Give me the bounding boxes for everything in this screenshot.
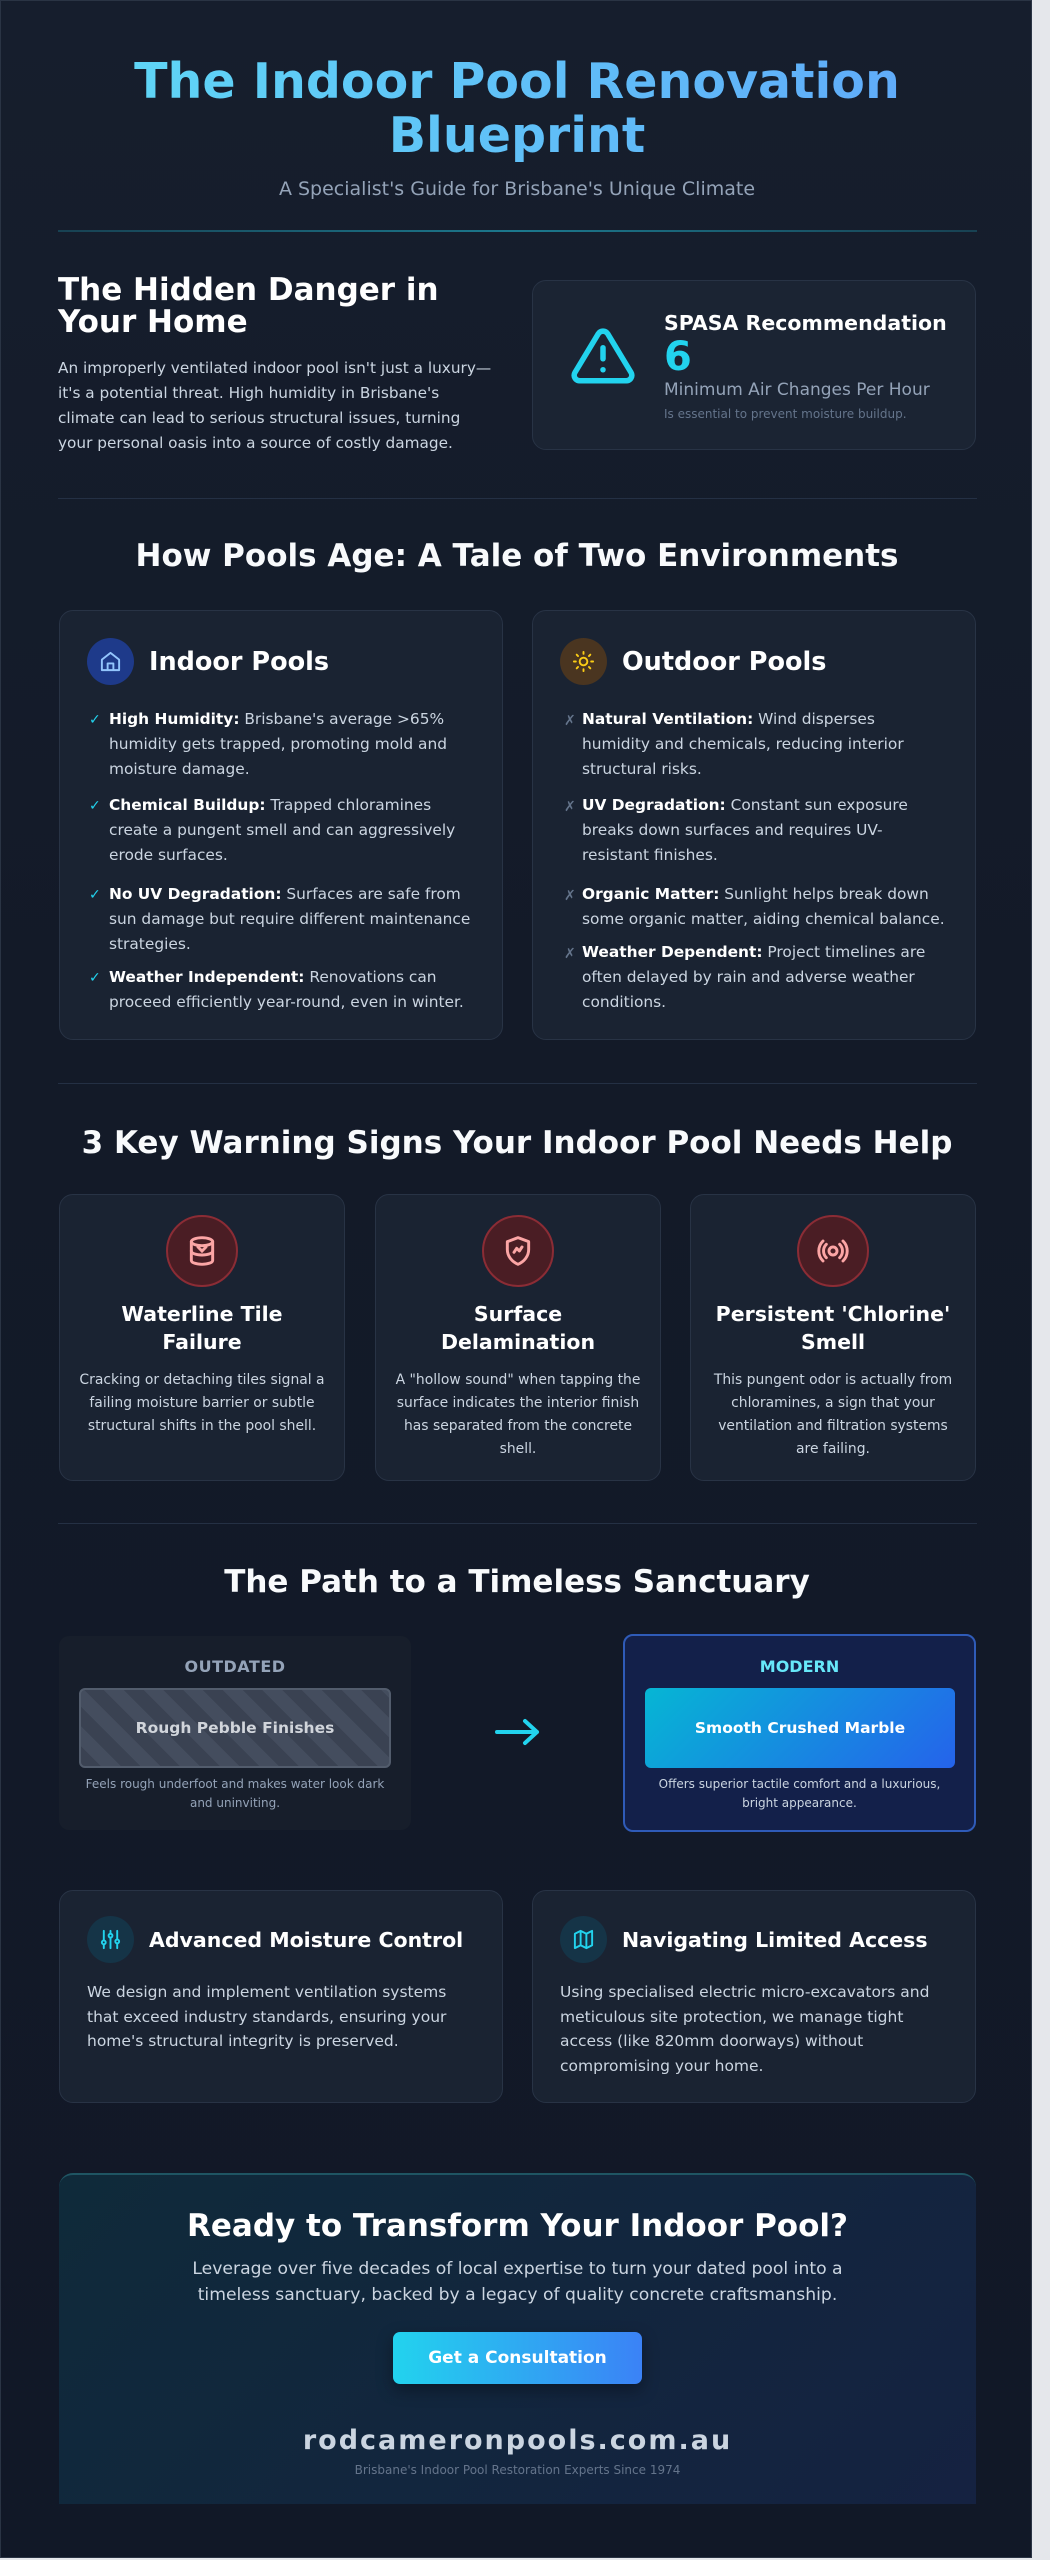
text: limited access: Using specialised electric micro-excavators and xyxy=(560,1983,929,2001)
swatch: smooth marble: Smooth Crushed Marble xyxy=(695,1719,905,1737)
text: waterline: Cracking or detaching tiles signal a xyxy=(79,1372,325,1388)
text: modern desc: Offers superior tactile comfort and a luxurious, xyxy=(659,1777,940,1791)
heading: hidden danger: Your Home xyxy=(58,304,248,340)
heading: indoor pools: Indoor Pools xyxy=(149,647,329,677)
text: delamination: surface indicates the interior finish xyxy=(397,1395,639,1411)
list: outdoor points: Organic Matter: Sunlight helps break down xyxy=(582,885,929,903)
list: indoor points: strategies. xyxy=(109,935,191,953)
panel: call to action xyxy=(59,2173,976,2504)
list: outdoor points xyxy=(564,710,945,1011)
list: indoor points: ✓ xyxy=(89,887,101,903)
text: hidden danger paragraph: An improperly ventilated indoor pool isn't just a luxury— xyxy=(58,359,491,377)
text: waterline: structural shifts in the pool shell. xyxy=(88,1418,316,1434)
text: chlorine: chloramines, a sign that your xyxy=(731,1395,935,1411)
list: indoor points: ✓ xyxy=(89,712,101,728)
text: hidden danger paragraph: climate can lead to serious structural issues, turning xyxy=(58,409,460,427)
button: consultation: Get a Consultation xyxy=(428,2348,607,2368)
text: hidden danger paragraph: it's a potential threat. High humidity in Brisbane's xyxy=(58,384,439,402)
text: modern desc: bright appearance. xyxy=(742,1796,857,1810)
list: outdoor points: ✗ xyxy=(564,799,576,815)
swatch: smooth marble xyxy=(645,1688,955,1768)
list: outdoor points: resistant finishes. xyxy=(582,846,718,864)
text: moisture control: We design and implement ventilation systems xyxy=(87,1983,446,2001)
text: CTA paragraph xyxy=(192,2259,843,2305)
text: chlorine: ventilation and filtration systems xyxy=(718,1418,948,1434)
text: limited access xyxy=(560,1983,929,2074)
title: Blueprint xyxy=(389,107,645,164)
list: indoor points: ✓ xyxy=(89,798,101,814)
heading: delamination xyxy=(441,1302,595,1354)
text: SPASA stat: Is essential to prevent moisture buildup. xyxy=(664,407,907,421)
list: indoor points: ✓ xyxy=(89,970,101,986)
list: indoor points: sun damage but require different maintenance xyxy=(109,910,470,928)
list: indoor points: create a pungent smell and can aggressively xyxy=(109,821,455,839)
text: hidden danger paragraph xyxy=(58,359,491,452)
text: chlorine xyxy=(714,1372,952,1457)
text: limited access: access (like 820mm doorways) without xyxy=(560,2032,863,2050)
heading: moisture control: Advanced Moisture Control xyxy=(149,1928,463,1952)
text: delamination: shell. xyxy=(500,1441,536,1457)
list: indoor points: proceed efficiently year-round, even in winter. xyxy=(109,993,464,1011)
text: chlorine: are failing. xyxy=(796,1441,870,1457)
text: moisture control: that exceed industry standards, ensuring your xyxy=(87,2008,446,2026)
heading: hidden danger xyxy=(58,272,439,340)
title xyxy=(1,55,1033,163)
arrow xyxy=(495,1718,540,1746)
heading: outdoor pools: Outdoor Pools xyxy=(622,647,826,677)
text: moisture control: home's structural integrity is preserved. xyxy=(87,2032,399,2050)
icon: warning xyxy=(571,328,635,384)
swatch: rough pebble: Rough Pebble Finishes xyxy=(136,1719,334,1737)
text: moisture control xyxy=(87,1983,446,2050)
panel: limited access xyxy=(532,1890,976,2103)
panel: chlorine smell xyxy=(690,1194,976,1481)
list: indoor points: No UV Degradation: Surfaces are safe from xyxy=(109,885,461,903)
text: outdated desc: Feels rough underfoot and makes water look dark xyxy=(86,1777,384,1791)
button: consultation xyxy=(393,2332,642,2384)
panel: SPASA callout xyxy=(532,280,976,450)
subtitle: A Specialist's Guide for Brisbane's Unique Climate xyxy=(279,178,755,200)
text: delamination xyxy=(396,1372,640,1457)
text: delamination: A "hollow sound" when tapping the xyxy=(396,1372,640,1388)
swatch: rough pebble xyxy=(79,1688,391,1768)
panel: indoor pools xyxy=(59,610,503,1040)
heading: path to sanctuary: The Path to a Timeless Sanctuary xyxy=(224,1564,810,1600)
icon: sun xyxy=(560,638,607,685)
text: SPASA stat: 6 xyxy=(664,334,692,380)
text: tagline: Brisbane's Indoor Pool Restoration Experts Since 1974 xyxy=(355,2463,680,2477)
text: SPASA stat: SPASA Recommendation xyxy=(664,311,947,335)
heading: delamination: Surface xyxy=(474,1302,562,1326)
text: CTA paragraph: Leverage over five decades of local expertise to turn your dated pool into a xyxy=(192,2259,843,2279)
text: chlorine: This pungent odor is actually from xyxy=(714,1372,952,1388)
heading: waterline xyxy=(121,1302,283,1354)
list: outdoor points: some organic matter, aiding chemical balance. xyxy=(582,910,945,928)
panel: waterline tile failure xyxy=(59,1194,345,1481)
list: outdoor points: structural risks. xyxy=(582,760,702,778)
heading: waterline: Failure xyxy=(162,1330,242,1354)
text: hidden danger paragraph: your personal oasis into a source of costly damage. xyxy=(58,434,453,452)
text: CTA paragraph: timeless sanctuary, backed by a legacy of quality concrete craftsmanship. xyxy=(198,2285,837,2305)
label: modern: MODERN xyxy=(760,1657,839,1676)
list: indoor points xyxy=(89,710,470,1011)
icon: shield xyxy=(482,1215,554,1287)
heading: how pools age: How Pools Age: A Tale of Two Environments xyxy=(136,538,898,574)
list: outdoor points: ✗ xyxy=(564,713,576,729)
list: outdoor points: humidity and chemicals, reducing interior xyxy=(582,735,904,753)
text: domain: rodcameronpools.com.au xyxy=(303,2425,732,2456)
heading: chlorine xyxy=(716,1302,950,1354)
panel: modern xyxy=(623,1634,976,1832)
heading: chlorine: Persistent 'Chlorine' xyxy=(716,1302,950,1326)
list: indoor points: High Humidity: Brisbane's average >65% xyxy=(109,710,444,728)
list: outdoor points: conditions. xyxy=(582,993,666,1011)
text: waterline: failing moisture barrier or subtle xyxy=(89,1395,315,1411)
icon: map xyxy=(560,1916,607,1963)
icon: sliders xyxy=(87,1916,134,1963)
text: outdated desc: and uninviting. xyxy=(190,1796,280,1810)
text: limited access: compromising your home. xyxy=(560,2056,763,2074)
text: SPASA stat xyxy=(664,311,947,421)
text: SPASA stat: Minimum Air Changes Per Hour xyxy=(664,380,930,400)
text: delamination: has separated from the concrete xyxy=(404,1418,632,1434)
text: outdated desc xyxy=(86,1777,384,1810)
icon: tiles xyxy=(166,1215,238,1287)
panel: moisture control xyxy=(59,1890,503,2103)
label: outdated: OUTDATED xyxy=(184,1657,286,1676)
title: The Indoor Pool Renovation xyxy=(134,53,900,110)
heading: hidden danger: The Hidden Danger in xyxy=(58,272,439,308)
panel: outdoor pools xyxy=(532,610,976,1040)
list: indoor points: moisture damage. xyxy=(109,760,250,778)
heading: limited access: Navigating Limited Access xyxy=(622,1928,928,1952)
list: outdoor points: breaks down surfaces and requires UV- xyxy=(582,821,883,839)
icon: house xyxy=(87,638,134,685)
list: indoor points: erode surfaces. xyxy=(109,846,228,864)
heading: delamination: Delamination xyxy=(441,1330,595,1354)
text: modern desc xyxy=(659,1777,940,1810)
text: waterline xyxy=(79,1372,325,1434)
list: indoor points: Weather Independent: Renovations can xyxy=(109,968,437,986)
list: outdoor points: Natural Ventilation: Wind disperses xyxy=(582,710,875,728)
list: outdoor points: Weather Dependent: Project timelines are xyxy=(582,943,925,961)
list: indoor points: humidity gets trapped, promoting mold and xyxy=(109,735,447,753)
list: outdoor points: ✗ xyxy=(564,888,576,904)
list: outdoor points: often delayed by rain and adverse weather xyxy=(582,968,915,986)
panel: surface delamination xyxy=(375,1194,661,1481)
panel: outdated xyxy=(59,1636,411,1830)
text: limited access: meticulous site protection, we manage tight xyxy=(560,2008,903,2026)
icon: broadcast xyxy=(797,1215,869,1287)
list: indoor points: Chemical Buildup: Trapped chloramines xyxy=(109,796,431,814)
heading: waterline: Waterline Tile xyxy=(121,1302,283,1326)
heading: warning signs: 3 Key Warning Signs Your Indoor Pool Needs Help xyxy=(82,1125,952,1161)
list: outdoor points: ✗ xyxy=(564,946,576,962)
list: outdoor points: UV Degradation: Constant sun exposure xyxy=(582,796,908,814)
heading: chlorine: Smell xyxy=(801,1330,865,1354)
heading: CTA: Ready to Transform Your Indoor Pool? xyxy=(187,2208,848,2244)
